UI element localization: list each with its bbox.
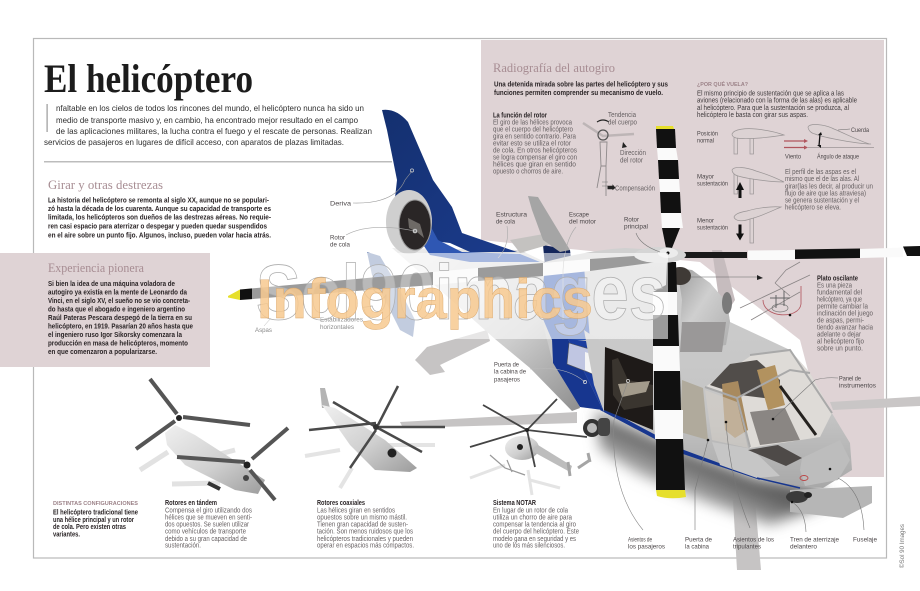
callout labels with leader lines: Rotor — [624, 216, 640, 224]
text: sistema NOTAR: utiliza un chorro de aire para — [493, 514, 572, 522]
text: rotores en tándem — [165, 500, 253, 550]
section: experiencia pionera: do hasta que el abogado e ingeniero argentino — [48, 306, 185, 314]
text: perfil de las aspas: El perfil de las aspas es el — [785, 169, 856, 176]
callout labels with leader lines: del motor — [569, 218, 597, 226]
callout labels with leader lines: Fuselaje — [853, 536, 877, 544]
text: plato oscilante: fundamental del — [817, 290, 862, 296]
text: rotores en tándem: Rotores en tándem — [165, 500, 217, 507]
callout labels with leader lines: Escape — [569, 212, 589, 218]
label: aspas: Aspas — [255, 327, 273, 334]
text: perfil de las aspas: flujo de aire que las atraviesa) — [785, 190, 866, 198]
text: sistema NOTAR: del cuerpo del helicóptero. Este — [493, 528, 579, 536]
diagram: airfoil positions: Menor — [697, 218, 715, 224]
text: rotores en tándem: dos opuestos. Se suelen utilizar — [165, 522, 250, 528]
intro text block: de las aplicaciones militares, la lucha contra el fuego y el rescate de personas. Realizan — [56, 127, 372, 136]
intro text block: nfaltable en los cielos de todos los rincones del mundo, el helicóptero nunca ha sido un — [56, 104, 364, 113]
callout labels with leader lines — [330, 169, 877, 550]
rotor hub — [634, 247, 686, 263]
illustration: coaxial rotors helicopter — [305, 386, 445, 488]
illustration: NOTAR helicopter — [470, 399, 590, 495]
section: experiencia pionera: Experiencia pionera — [48, 261, 144, 275]
text: rotores coaxiales: Tienen gran capacidad de susten- — [317, 522, 409, 528]
upper tail stabilizer — [510, 196, 572, 266]
lower tail stabilizer — [367, 252, 415, 337]
engine cowling — [677, 268, 730, 350]
text: rotores en tándem: Compensa el giro utilizando dos — [165, 508, 252, 514]
text: rotores coaxiales: opuestos sobre un mismo mástil. — [317, 514, 407, 522]
text: la función del rotor: gira en sentido contrario. Para — [493, 134, 576, 140]
callout labels with leader lines: Asientos de — [628, 536, 652, 544]
text: la función del rotor: hélices que giran en sentido — [493, 162, 576, 168]
text: por qué vuela: ¿POR QUÉ VUELA? — [697, 80, 748, 88]
diagram: airfoil positions: Cuerda — [851, 127, 869, 134]
text: rotores coaxiales: Rotores coaxiales — [317, 500, 365, 507]
passenger door window — [567, 343, 599, 376]
text: distintas configuraciones — [53, 501, 138, 538]
credit: ©Sol 90 Images — [899, 524, 906, 568]
panel: experiencia pionera background — [0, 253, 210, 367]
text: rotores en tándem: sustentación. — [165, 542, 201, 550]
callout labels with leader lines: los pasajeros — [628, 544, 666, 550]
watermark: outlined text: Sol90images — [256, 248, 666, 336]
text: rotores en tándem: hélices que se mueven en senti- — [165, 514, 253, 522]
section: experiencia pionera: producción en masa de helicópteros, momento — [48, 340, 188, 348]
text: distintas configuraciones: una hélice principal y un rotor — [53, 517, 134, 524]
text: plato oscilante: al helicóptero fijo — [817, 338, 864, 346]
diagram: airfoil positions: Viento — [785, 154, 801, 160]
text: la función del rotor — [493, 112, 577, 176]
text: perfil de las aspas — [785, 169, 873, 212]
text: la función del rotor: La función del rotor — [493, 112, 547, 120]
section: girar y otras destrezas: limitada, los helicópteros son dueños de las destrezas aéreas. No requie- — [48, 214, 272, 222]
callout labels with leader lines: de cola — [496, 218, 515, 226]
label: aspas — [255, 318, 273, 334]
text: plato oscilante: adelante o dejar — [817, 332, 862, 338]
text: la función del rotor: se logra compensar el giro con — [493, 154, 577, 162]
watermark wash band — [252, 253, 668, 339]
callout labels with leader lines: la cabina de — [494, 368, 526, 376]
section: experiencia pionera: helicóptero, en 1919. Pasarían 20 años hasta que — [48, 324, 193, 330]
text: perfil de las aspas: mismo que el de las alas. Al — [785, 176, 859, 183]
text: plato oscilante: de aspas, permi- — [817, 318, 865, 324]
text: perfil de las aspas: girar(las les decir, al producir un — [785, 184, 873, 190]
section: experiencia pionera: Vinci, en el siglo XV, el sueño no se vio concreta- — [48, 298, 191, 305]
callout labels with leader lines: de cola — [330, 242, 350, 248]
section: girar y otras destrezas: La historia del helicóptero se remonta al siglo XX, aunque no se populari- — [48, 198, 270, 204]
section: girar y otras destrezas: zó hasta la década de los cuarenta. Aunque su capacidad de transporte es — [48, 206, 271, 213]
blue livery — [540, 266, 760, 480]
diagram: airfoil positions: sustentación — [697, 224, 728, 232]
section: radiografía header: Una detenida mirada sobre las partes del helicóptero y sus — [494, 82, 668, 88]
text: plato oscilante: Es una pieza — [817, 282, 852, 290]
section: experiencia pionera: Si bien la idea de una máquina voladora de — [48, 281, 175, 288]
diagram: airfoil positions: normal — [697, 138, 714, 144]
nose lower panels — [712, 440, 850, 488]
fuselage — [540, 248, 852, 488]
text: plato oscilante: inclinación del juego — [817, 310, 873, 318]
callout labels with leader lines: Puerta de — [494, 362, 519, 368]
text: perfil de las aspas: se genera sustentación y el — [785, 198, 859, 204]
text: sistema NOTAR: En lugar de un rotor de cola — [493, 508, 568, 514]
diagram: rotor tendency: Compensación — [615, 186, 655, 192]
text: por qué vuela: El mismo principio de sustentación que se aplica a las — [697, 90, 844, 98]
tail fin — [382, 110, 540, 262]
section: girar y otras destrezas: en el aire sobre un punto fijo. Algunos, incluso, pueden volar hacia atrás. — [48, 232, 271, 240]
panel: radiografía del autogiro background — [481, 40, 884, 477]
text: plato oscilante: helicóptero, ya que — [817, 296, 862, 304]
text: distintas configuraciones: de cola. Pero existen otras — [53, 524, 126, 531]
text: sistema NOTAR: Sistema NOTAR — [493, 500, 536, 507]
tail rotor shroud — [386, 190, 432, 254]
title: El helicóptero — [44, 56, 253, 101]
diagram: airfoil positions: Ángulo de ataque — [817, 152, 859, 160]
callout labels with leader lines: Deriva — [330, 200, 351, 208]
callout labels with leader lines: principal — [624, 224, 649, 230]
text: plato oscilante: tiendo avanzar hacia — [817, 324, 873, 332]
section: experiencia pionera: autogiro ya existía en la mente de Leonardo da — [48, 290, 187, 296]
text: plato oscilante: Plato oscilante — [817, 276, 858, 282]
label: estabilizadores horizontales — [320, 316, 364, 331]
section: experiencia pionera: Raúl Pateras Pescara despegó de la tierra en su — [48, 315, 192, 322]
diagram: rotor tendency: del rotor — [620, 158, 644, 164]
callout labels with leader lines: la cabina — [685, 544, 709, 550]
text: distintas configuraciones: variantes. — [53, 532, 80, 538]
label: estabilizadores horizontales: Estabilizadores — [320, 316, 364, 324]
text: plato oscilante: sobre un punto. — [817, 346, 863, 352]
text: por qué vuela: al helicóptero. Para que la sustentación se produzca, al — [697, 105, 849, 112]
callout labels with leader lines: Asientos de los — [733, 536, 775, 544]
intro text block: medio de transporte masivo y, en cambio, ha encontrado mejor resultado en el campo — [56, 116, 358, 125]
section: experiencia pionera: en que comenzaron a popularizarse. — [48, 349, 157, 356]
ground shadows of rotor blades — [400, 250, 920, 570]
intro text block — [44, 104, 372, 147]
text: la función del rotor: opuesto o chorros de aire. — [493, 168, 563, 176]
text: la función del rotor: de cola. En otros helicópteros — [493, 148, 577, 154]
text: distintas configuraciones: El helicóptero tradicional tiene — [53, 510, 138, 516]
text: la función del rotor: El giro de las hélices provoca — [493, 120, 572, 126]
text: distintas configuraciones: DISTINTAS CONFIGURACIONES — [53, 501, 138, 507]
callout labels with leader lines: Rotor — [330, 234, 346, 242]
callout labels with leader lines: Tren de aterrizaje — [790, 536, 839, 544]
section: girar y otras destrezas — [48, 178, 272, 240]
callout labels with leader lines: Panel de — [839, 376, 861, 382]
illustration: tandem rotors helicopter — [136, 379, 288, 500]
main rotor upper blade — [656, 126, 683, 248]
text: rotores en tándem: como vehículos de transporte — [165, 528, 246, 536]
section: radiografía header: Radiografía del autogiro — [493, 60, 615, 75]
canopy and cockpit — [680, 350, 832, 448]
landing gear — [583, 418, 812, 503]
illustration: main helicopter — [228, 110, 920, 525]
label: estabilizadores horizontales: horizontales — [320, 324, 355, 331]
text: sistema NOTAR — [493, 500, 579, 550]
diagram: rotor tendency: Dirección — [620, 150, 646, 157]
section: girar y otras destrezas: Girar y otras destrezas — [48, 178, 163, 192]
diagram: airfoil positions — [697, 125, 874, 243]
text: rotores coaxiales: tación. Son menos ruidosos que los — [317, 528, 413, 536]
main rotor lower blade — [653, 262, 686, 498]
section: experiencia pionera: el ingeniero ruso Igor Sikorsky comenzara la — [48, 332, 182, 339]
section: radiografía header: funciones permiten comprender su mecanismo de vuelo. — [494, 90, 663, 97]
callout labels with leader lines: tripulantes — [733, 544, 762, 550]
text: plato oscilante — [817, 276, 873, 352]
side panel — [584, 330, 607, 412]
text: la función del rotor: evitar esto se utiliza el rotor — [493, 140, 572, 148]
section: experiencia pionera — [48, 261, 193, 356]
watermark: orange text: Infographics — [257, 267, 593, 330]
callout labels with leader lines: pasajeros — [494, 376, 521, 384]
text: por qué vuela: aviones (relacionado con la forma de las alas) es aplicable — [697, 98, 857, 104]
intro text block: servicios de pasajeros en lugares de difícil acceso, con aparatos de plazas limitadas. — [44, 138, 344, 147]
tail boom — [392, 248, 580, 411]
text: sistema NOTAR: uno de los más silenciosos. — [493, 542, 565, 550]
text: sistema NOTAR: modelo gana en seguridad y es — [493, 536, 576, 543]
diagram: airfoil positions: sustentación — [697, 180, 728, 188]
main rotor right blade — [670, 246, 920, 260]
text: rotores coaxiales: Las hélices giran en sentidos — [317, 508, 395, 514]
text: rotores en tándem: debido a su gran capacidad de — [165, 536, 247, 543]
callout labels with leader lines: Estructura — [496, 212, 527, 218]
text: rotores coaxiales — [317, 500, 414, 550]
diagram: airfoil positions: Mayor — [697, 174, 715, 180]
diagram: rotor tendency — [583, 112, 655, 196]
text: plato oscilante: permite cambiar la — [817, 304, 868, 310]
text: por qué vuela — [697, 80, 857, 119]
text: por qué vuela: helicóptero le basta con girar sus aspas. — [697, 112, 808, 119]
main rotor left blade — [228, 254, 665, 300]
diagram: rotor tendency: del cuerpo — [608, 120, 637, 126]
text: perfil de las aspas: helicóptero se eleva. — [785, 204, 841, 212]
diagram: rotor tendency: Tendencia — [608, 112, 636, 119]
diagram: airfoil positions: Posición — [697, 130, 718, 138]
section: girar y otras destrezas: ren casi espacio para aterrizar o despegar y pueden quedar suspendidos — [48, 223, 267, 230]
text: la función del rotor: que el cuerpo del helicóptero — [493, 126, 573, 134]
callout labels with leader lines: delantero — [790, 544, 817, 550]
nose ground shadow — [790, 486, 872, 518]
open cabin doorway — [604, 347, 653, 430]
text: rotores coaxiales: operar en espacios más compactos. — [317, 542, 414, 550]
callout labels with leader lines: Puerta de — [685, 536, 712, 544]
callout labels with leader lines: instrumentos — [839, 382, 877, 390]
helicopter belly shadow — [596, 412, 823, 525]
text: rotores coaxiales: helicópteros tradicionales y pueden — [317, 536, 413, 543]
section: radiografía header — [493, 60, 668, 97]
diagram: plato oscilante — [690, 262, 810, 320]
text: sistema NOTAR: compensar la tendencia al giro — [493, 522, 576, 528]
